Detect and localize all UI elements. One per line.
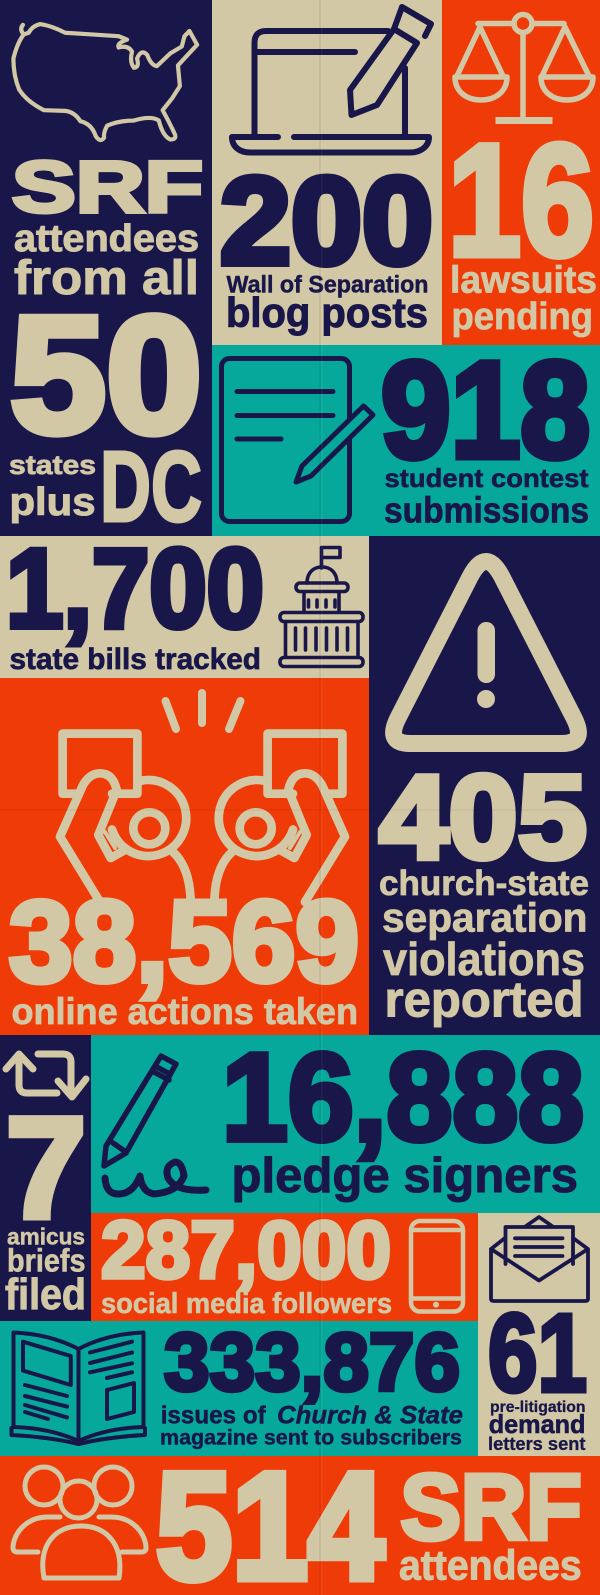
icon: open magazine xyxy=(12,1332,145,1444)
icon: open envelope with letter xyxy=(491,1217,588,1301)
panel: SRF attendees xyxy=(0,1442,600,1595)
letters sent: letters sent xyxy=(488,1434,586,1454)
number 405: 405 xyxy=(379,751,587,884)
SRF: SRF xyxy=(400,1455,582,1559)
attendees: attendees xyxy=(399,1542,582,1588)
icon: document with pen xyxy=(222,358,373,522)
reported: reported xyxy=(384,972,584,1028)
DC: DC xyxy=(100,431,202,543)
panel: magazine issues xyxy=(0,1317,478,1456)
panel: pledge signers xyxy=(91,1029,600,1213)
panel: social media followers xyxy=(91,1206,478,1321)
panel: SRF attendees from all 50 states xyxy=(0,0,212,543)
filed: filed xyxy=(5,1270,86,1319)
issues of Church & State xyxy=(161,1402,463,1430)
icon: US map outline xyxy=(13,24,197,140)
states: states xyxy=(9,450,96,480)
number 50: 50 xyxy=(10,283,202,468)
separation: separation xyxy=(382,895,588,941)
panel: lawsuits pending xyxy=(442,0,600,345)
panel: online actions taken xyxy=(0,678,369,1035)
online actions taken: online actions taken xyxy=(12,991,358,1032)
number 7: 7 xyxy=(6,1089,86,1248)
Wall of Separation: Wall of Separation xyxy=(226,272,428,298)
student contest: student contest xyxy=(384,463,589,493)
panel: pre-litigation demand letters sent xyxy=(478,1213,600,1456)
issues of Church & State: Church & State xyxy=(277,1402,463,1430)
icon: laptop with pencil xyxy=(232,7,431,152)
panel: blog posts xyxy=(212,0,442,345)
panel: state bills tracked xyxy=(0,526,370,678)
icon: scales of justice xyxy=(455,14,593,124)
icon: protester with sign, right xyxy=(214,734,345,905)
church-state: church-state xyxy=(379,864,589,903)
icon: repost arrows xyxy=(6,1054,86,1097)
issues of Church & State: issues of xyxy=(161,1402,266,1430)
lawsuits: lawsuits xyxy=(450,260,597,302)
icon: protester with sign, left xyxy=(60,734,191,905)
blog posts: blog posts xyxy=(226,289,428,336)
panel: amicus briefs filed xyxy=(0,1035,91,1321)
plus: plus xyxy=(10,481,96,524)
state bills tracked: state bills tracked xyxy=(10,643,261,676)
icon: smartphone xyxy=(411,1221,463,1312)
demand: demand xyxy=(489,1409,586,1439)
icon: warning triangle xyxy=(394,562,578,744)
icon: pencil with signature xyxy=(104,1056,206,1194)
number 287,000: 287,000 xyxy=(101,1206,391,1296)
pledge signers: pledge signers xyxy=(232,1149,578,1203)
number 333,876: 333,876 xyxy=(164,1317,460,1408)
number 200: 200 xyxy=(220,154,433,290)
amicus: amicus xyxy=(7,1224,85,1250)
panel: church-state violations reported xyxy=(369,536,600,1035)
icon: group of people xyxy=(13,1467,146,1578)
number 1,700: 1,700 xyxy=(6,526,264,651)
magazine sent to subscribers: magazine sent to subscribers xyxy=(160,1426,462,1450)
icon: rays above protest signs xyxy=(166,693,240,729)
briefs: briefs xyxy=(7,1242,86,1278)
SRF: SRF xyxy=(12,148,203,228)
pre-litigation: pre-litigation xyxy=(490,1399,586,1416)
attendees: attendees xyxy=(14,218,199,260)
icon: capitol building xyxy=(280,548,363,666)
pending: pending xyxy=(452,296,593,338)
from all: from all xyxy=(14,252,199,305)
number 38,569: 38,569 xyxy=(9,878,359,1006)
panel: student contest submissions xyxy=(212,334,600,536)
violations: violations xyxy=(383,933,585,985)
number 16,888: 16,888 xyxy=(222,1029,584,1167)
social media followers: social media followers xyxy=(101,1288,392,1320)
